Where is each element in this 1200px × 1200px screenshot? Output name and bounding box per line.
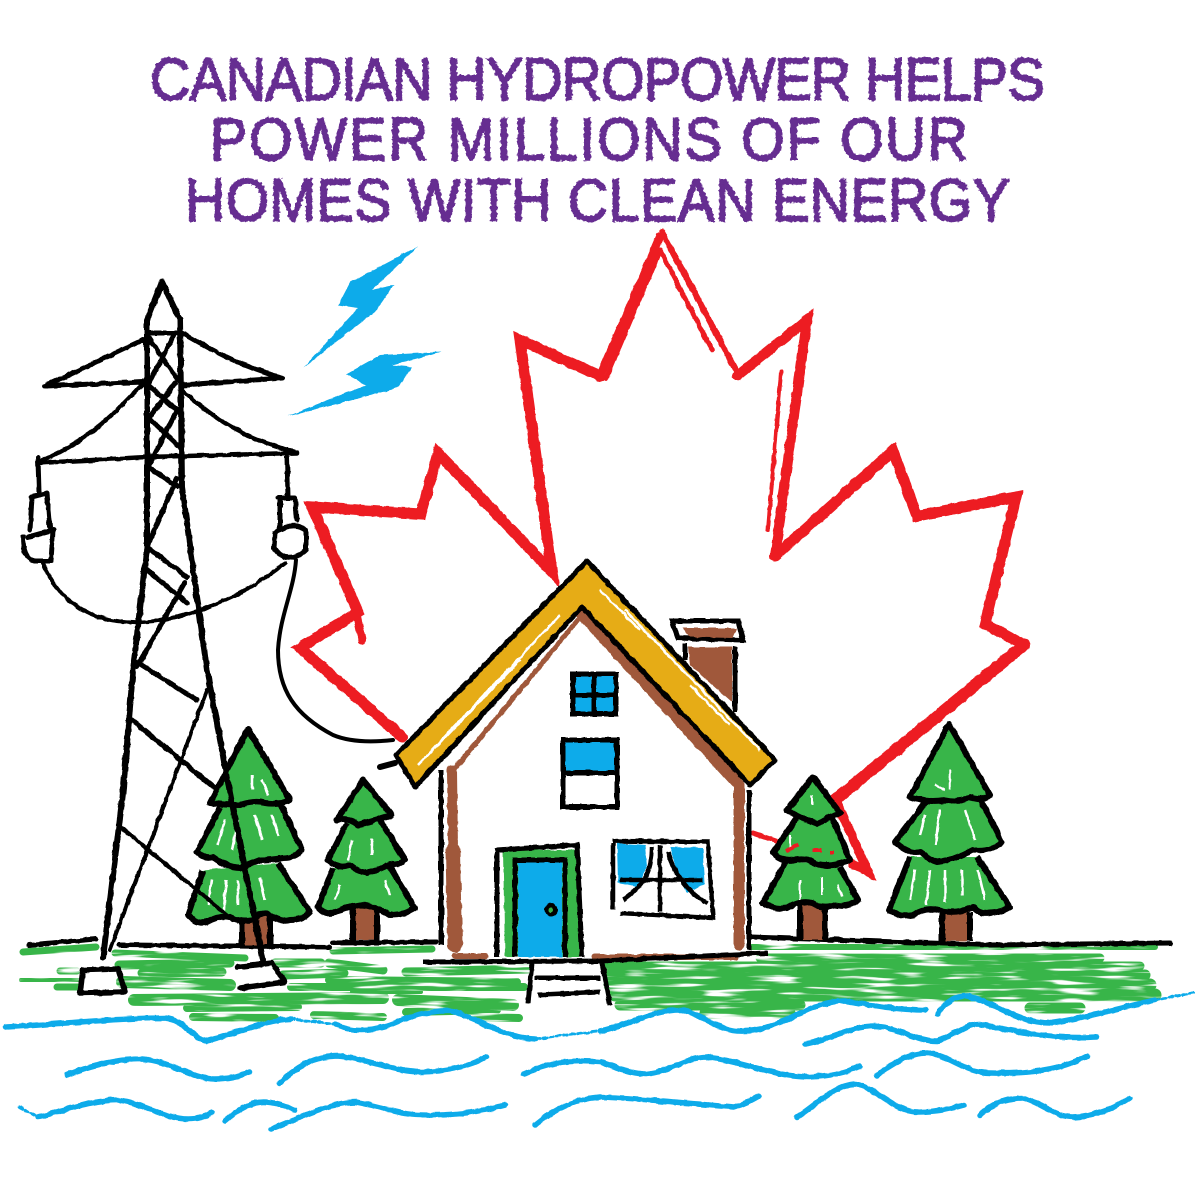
trunk: [942, 910, 970, 941]
transmission tower: [23, 282, 306, 993]
lower right window with curtains: [612, 841, 713, 918]
streaks: [208, 775, 278, 910]
streaks: [790, 795, 842, 900]
foliage: [188, 863, 310, 923]
title: POWER MILLIONS OF OUR: [210, 107, 968, 173]
streaks: [910, 770, 985, 905]
trunk: [353, 905, 377, 940]
title: [150, 47, 1045, 234]
row 2: [67, 1053, 1087, 1084]
red leaf specks over tree: [786, 845, 834, 853]
ground grass: [21, 947, 1155, 1018]
power line wire to house: [278, 560, 395, 767]
tree 2: [318, 780, 415, 943]
row 3: [38, 1084, 1130, 1129]
lattice bracing: [132, 333, 217, 790]
foliage: [889, 857, 1010, 916]
title: HOMES WITH CLEAN ENERGY: [185, 168, 1010, 234]
foliage: [763, 860, 858, 908]
tree 1: [188, 729, 310, 946]
right insulator: [274, 457, 306, 557]
house: [396, 561, 775, 1005]
trunk: [243, 915, 270, 945]
brown wall strokes: [452, 614, 739, 957]
streaks: [335, 838, 390, 900]
maple leaf outline: [300, 232, 1024, 872]
wall fill: [445, 620, 745, 950]
roof: [396, 561, 775, 787]
suspended wire: [43, 563, 285, 622]
upper cross arm: [45, 333, 283, 386]
right foot: [238, 963, 285, 988]
door: [497, 845, 582, 957]
row 1: [6, 996, 1155, 1041]
foliage: [318, 867, 415, 915]
middle window: [563, 740, 617, 807]
lower cross arm: [38, 383, 297, 463]
title: CANADIAN HYDROPOWER HELPS: [150, 47, 1045, 113]
icon: lightning bolts: [287, 246, 442, 416]
ground horizon lines: [29, 937, 1170, 947]
front steps: [528, 963, 610, 1005]
upper window: [573, 674, 616, 714]
left foot: [80, 969, 125, 993]
trunk: [800, 905, 825, 940]
water waves: [6, 993, 1193, 1129]
tree 3: [763, 777, 858, 940]
tree 4: [889, 724, 1010, 941]
fading stroke joins: [19, 993, 1193, 1117]
chimney: [672, 621, 743, 712]
tower legs: [103, 282, 263, 960]
black wall lines: [423, 770, 768, 962]
left insulator: [23, 458, 53, 561]
